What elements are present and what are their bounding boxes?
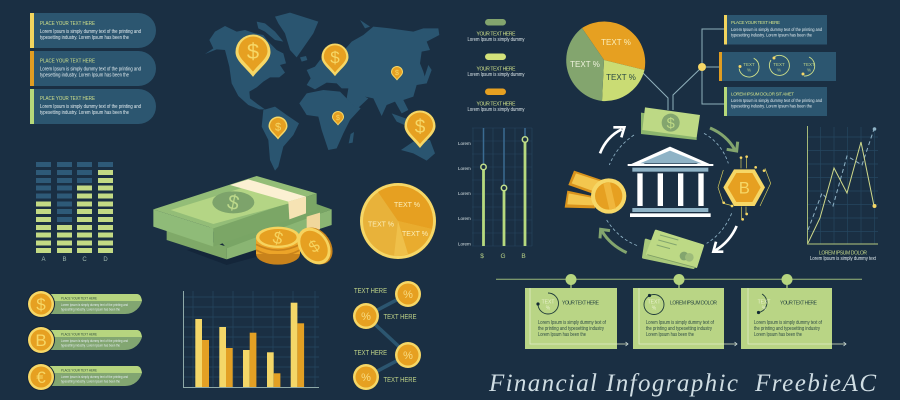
panel: percent rings: % xyxy=(777,68,781,72)
banner: bitcoin: PLACE YOUR TEXT HERE xyxy=(61,332,97,336)
title xyxy=(488,370,876,397)
legend pills: Lorem Ipsum is simply dummy xyxy=(468,37,525,43)
banner: euro xyxy=(27,363,142,391)
banner: bitcoin xyxy=(27,326,142,354)
line chart: LOREM IPSUM DOLOR xyxy=(819,250,867,256)
line chart: Lorem Ipsum is simply dummy text xyxy=(810,256,877,262)
timeline card 1: % xyxy=(546,306,551,312)
pie chart xyxy=(566,21,645,101)
pill 1: Lorem Ipsum is simply dummy text of the printing and xyxy=(40,29,141,35)
pill 3: PLACE YOUR TEXT HERE xyxy=(40,96,96,102)
pie chart: TEXT % xyxy=(606,73,636,82)
legend pills xyxy=(468,19,525,113)
node 2: % xyxy=(361,311,371,323)
panel: top-right text 2: typesetting industry. Lorem Ipsum has been the xyxy=(731,104,812,108)
timeline card 2: % xyxy=(652,306,657,312)
slider chart: Lorem xyxy=(458,166,471,171)
pill 3: Lorem Ipsum is simply dummy text of the printing and xyxy=(40,104,141,110)
timeline card 3: YOUR TEXT HERE xyxy=(780,300,818,306)
pin: Africa: $ xyxy=(336,115,340,122)
title: FreebieAC xyxy=(754,370,876,397)
pin: Asia xyxy=(391,66,403,81)
node 3: % xyxy=(403,350,413,362)
timeline card 2 xyxy=(633,288,737,349)
slider chart xyxy=(458,128,532,260)
pin: North America: $ xyxy=(247,39,259,64)
gold pie coin: TEXT % xyxy=(368,222,394,228)
pill 2: Lorem Ipsum is simply dummy text of the printing and xyxy=(40,66,141,72)
slider chart: Lorem xyxy=(458,191,471,196)
pin: North America xyxy=(236,34,270,77)
panel: percent rings: TEXT xyxy=(743,62,755,67)
banner: dollar: PLACE YOUR TEXT HERE xyxy=(61,296,97,300)
banner: bitcoin: Lorem Ipsum is simply dummy text of the printing and xyxy=(61,338,128,343)
panel: percent rings: % xyxy=(747,68,751,72)
pin: Europe xyxy=(322,44,348,76)
panel: top-right text 1: Lorem Ipsum is simply dummy text of the printing and xyxy=(731,27,822,32)
timeline card 3: TEXT xyxy=(758,300,770,306)
arrow: green top-right xyxy=(710,128,738,151)
node 4: % xyxy=(361,372,371,384)
legend pills: YOUR TEXT HERE xyxy=(476,102,516,108)
banner: dollar: typesetting industry. Lorem Ipsum has been the xyxy=(61,306,121,312)
equalizer bar chart xyxy=(36,162,113,263)
legend pills: YOUR TEXT HERE xyxy=(476,32,516,38)
timeline card 1: TEXT xyxy=(542,300,554,306)
node 1: % xyxy=(403,289,413,301)
map continents xyxy=(205,13,439,171)
timeline card 1 xyxy=(525,288,628,349)
tilted coin xyxy=(291,220,339,272)
timeline card 2: Lorem Ipsum is simply dummy text of xyxy=(646,320,714,326)
panel: top-right text 1: typesetting industry. Lorem Ipsum has been the xyxy=(731,32,812,38)
pill 3: typesetting industry. Lorem Ipsum has been the xyxy=(40,110,129,116)
finance cycle diagram xyxy=(565,107,771,268)
pin: Africa xyxy=(332,111,344,126)
percent node diagram: TEXT HERE xyxy=(384,377,417,384)
connector lines xyxy=(642,29,725,110)
pill 3 xyxy=(30,89,156,124)
gold pie coin: TEXT % xyxy=(402,231,428,238)
coin pile: $ xyxy=(271,227,286,249)
icon: gold bars and coin xyxy=(565,171,626,214)
percent node diagram: TEXT HERE xyxy=(354,350,387,357)
icon: banknotes xyxy=(641,107,700,140)
bottom-left currency banners xyxy=(27,290,142,391)
timeline card 1: Lorem Ipsum is simply dummy text of xyxy=(538,320,606,326)
banner: euro: PLACE YOUR TEXT HERE xyxy=(61,368,97,372)
pie chart: TEXT % xyxy=(570,60,600,69)
arrow: white bottom-right xyxy=(713,226,737,252)
connector junction dot xyxy=(698,63,706,71)
banner: bitcoin: B xyxy=(35,331,47,350)
tilted coin: $ xyxy=(305,236,324,257)
timeline card 1: the printing and typesetting industry xyxy=(538,326,604,332)
upper stack xyxy=(153,176,317,247)
timeline card 1: Lorem Ipsum has been the xyxy=(538,332,586,338)
banner: euro: Lorem Ipsum is simply dummy text of the printing and xyxy=(61,374,128,379)
timeline card 2: Lorem Ipsum has been the xyxy=(646,332,694,338)
illustration: cash stacks and coins xyxy=(153,176,339,272)
gold pie coin: TEXT % xyxy=(394,202,420,209)
gold pie coin xyxy=(360,183,436,259)
equalizer bar chart: B xyxy=(62,257,67,263)
pill 1: typesetting industry. Lorem Ipsum has been the xyxy=(40,35,129,41)
timeline card 2: LOREM IPSUM DOLOR xyxy=(670,300,717,306)
banner: bitcoin: typesetting industry. Lorem Ipsum has been the xyxy=(61,342,121,348)
panel: top-left text pills xyxy=(30,13,156,124)
timeline card 3: Lorem Ipsum is simply dummy text of xyxy=(754,320,822,326)
arrow: green bottom-left xyxy=(600,229,627,253)
lower stack xyxy=(167,193,332,259)
timeline card 2: TEXT xyxy=(648,300,660,306)
equalizer bar chart: A xyxy=(41,257,46,263)
percent node diagram xyxy=(353,281,421,390)
panel: percent rings xyxy=(719,52,836,81)
timeline card 3: Lorem Ipsum has been the xyxy=(754,332,802,338)
slider chart: Lorem xyxy=(458,141,471,146)
icon: banknotes: $ xyxy=(667,116,675,132)
timeline card 3 xyxy=(741,288,846,349)
pin: Australia: $ xyxy=(415,117,426,138)
slider chart: Lorem xyxy=(458,216,471,221)
percent node diagram: TEXT HERE xyxy=(354,288,387,295)
panel: top-right text 2 xyxy=(724,87,827,116)
panel: top-right text 2: LOREM IPSUM DOLOR SIT AMET xyxy=(731,92,794,96)
panel: percent rings: % xyxy=(807,68,811,72)
panel: percent rings: TEXT xyxy=(773,62,785,67)
timeline xyxy=(496,274,862,288)
timeline card 1: YOUR TEXT HERE xyxy=(562,300,600,306)
pin: Australia xyxy=(404,110,436,148)
pill 2 xyxy=(30,51,156,86)
icon: bitcoin chip: B xyxy=(739,178,750,197)
upper stack: $ xyxy=(225,190,242,215)
bar chart xyxy=(184,291,319,388)
banner: dollar: $ xyxy=(36,295,46,314)
pin: South America: $ xyxy=(275,122,281,134)
banner: dollar: Lorem Ipsum is simply dummy text of the printing and xyxy=(61,302,128,307)
pill 2: typesetting industry. Lorem Ipsum has been the xyxy=(40,72,129,78)
slider chart: G xyxy=(500,253,506,260)
legend pills: Lorem Ipsum is simply dummy xyxy=(468,107,525,113)
arrow: white top-left xyxy=(600,127,624,153)
world map with pins xyxy=(205,13,439,171)
banner: euro: typesetting industry. Lorem Ipsum has been the xyxy=(61,378,121,384)
legend pills: Lorem Ipsum is simply dummy xyxy=(468,72,525,78)
equalizer bar chart: D xyxy=(103,257,108,263)
line chart xyxy=(807,126,878,262)
pin: Asia: $ xyxy=(395,70,399,77)
dashed return arrows xyxy=(607,133,732,246)
pill 2: PLACE YOUR TEXT HERE xyxy=(40,58,96,64)
title: Financial xyxy=(488,370,597,397)
slider chart: Lorem xyxy=(458,242,471,246)
equalizer bar chart: C xyxy=(82,257,87,263)
pin: South America xyxy=(268,116,288,139)
percent node diagram: TEXT HERE xyxy=(384,314,417,321)
slider chart: B xyxy=(521,253,526,260)
banner: dollar xyxy=(27,290,142,318)
title: Infographic xyxy=(605,370,738,397)
timeline card 3: % xyxy=(762,306,767,312)
pill 1 xyxy=(30,13,156,48)
pie chart: TEXT % xyxy=(601,38,631,47)
legend pills: YOUR TEXT HERE xyxy=(476,66,516,72)
icon: bank building xyxy=(628,147,713,217)
banner: euro: € xyxy=(36,368,46,387)
pin: Europe: $ xyxy=(330,48,340,67)
icon: bitcoin chip xyxy=(718,155,771,221)
slider chart: $ xyxy=(480,253,484,260)
panel: percent rings: TEXT xyxy=(803,62,815,67)
panel: top-right text 2: Lorem Ipsum is simply dummy text of the printing and xyxy=(731,98,822,103)
panel: top-right text 1: PLACE YOUR TEXT HERE xyxy=(731,20,780,25)
coin pile xyxy=(256,227,300,265)
pill 1: PLACE YOUR TEXT HERE xyxy=(40,21,96,27)
timeline card 2: the printing and typesetting industry xyxy=(646,326,712,332)
timeline card 3: the printing and typesetting industry xyxy=(754,326,820,332)
panel: top-right text 1 xyxy=(724,15,827,44)
icon: credit cards xyxy=(643,231,703,268)
